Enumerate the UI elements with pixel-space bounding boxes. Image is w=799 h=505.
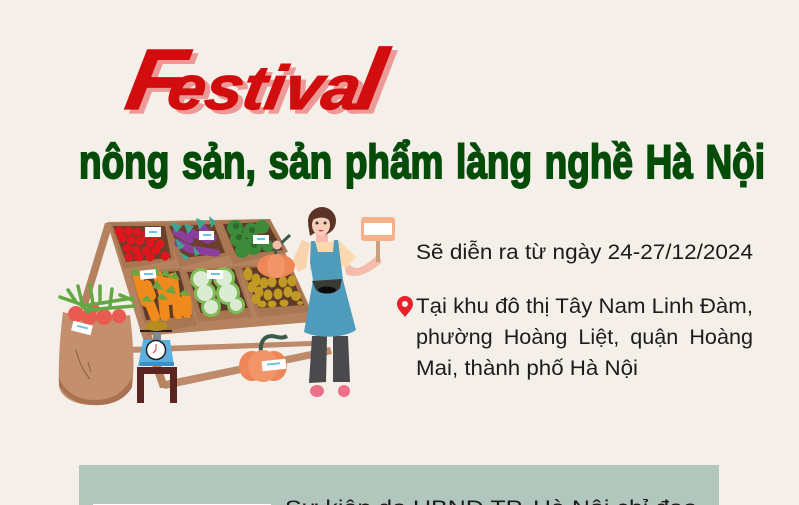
face (312, 214, 330, 236)
shoes (310, 385, 350, 397)
illustration: vegetable sack (59, 285, 134, 405)
event details text (397, 239, 753, 380)
crate: broccoli (219, 219, 288, 264)
panel: organiser information (79, 465, 719, 505)
crate: tomatoes (110, 223, 175, 269)
event address: phường Hoàng Liệt, quận Hoàng (416, 325, 753, 349)
panel image placeholder (93, 504, 271, 505)
illustration: scale on stool (137, 321, 177, 403)
icon: location pin (397, 296, 413, 317)
waist bag (312, 279, 342, 294)
event date: Sẽ diễn ra từ ngày 24-27/12/2024 (416, 239, 753, 264)
sack label (71, 321, 93, 335)
leaves in sack (60, 285, 134, 312)
crate: potatoes (238, 264, 310, 317)
illustration: vendor woman (257, 207, 395, 397)
sign (376, 241, 380, 262)
title: Festival: Festival (125, 36, 400, 132)
crate: cabbage (183, 266, 252, 322)
title: Festival: Festival (120, 32, 395, 128)
held pumpkin (275, 235, 290, 258)
illustration: market stall (80, 216, 332, 389)
neck and torso (316, 232, 328, 244)
event address: Mai, thành phố Hà Nội (416, 356, 638, 380)
stall frame (80, 219, 332, 389)
dress (304, 240, 356, 337)
event address: Tại khu đô thị Tây Nam Linh Đàm, (416, 294, 753, 318)
hair (308, 207, 336, 235)
crate: carrots (130, 265, 197, 335)
legs (309, 336, 350, 383)
illustration: pumpkin (239, 336, 287, 382)
event address (416, 294, 753, 380)
crate: eggplants (165, 216, 230, 267)
tomatoes in sack (68, 302, 126, 325)
arms (293, 240, 310, 272)
